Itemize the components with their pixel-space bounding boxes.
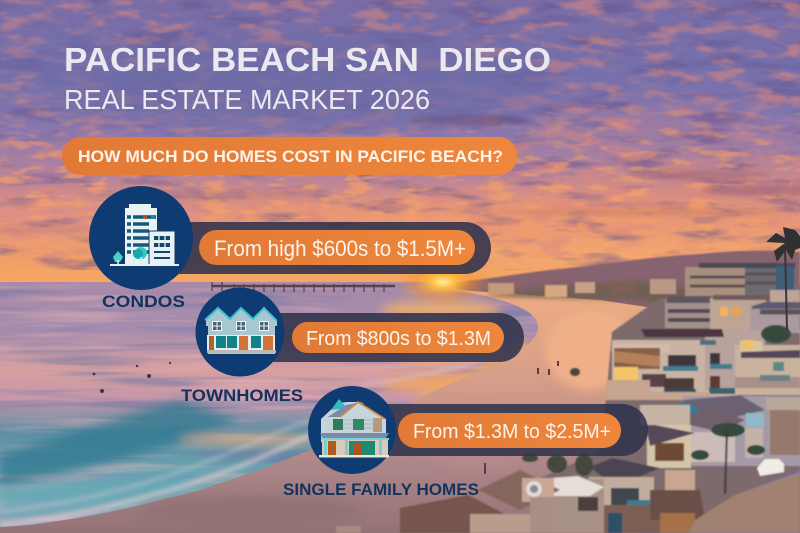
pier [212, 282, 395, 292]
title: PACIFIC BEACH SAN DIEGO [64, 41, 551, 78]
building mass [540, 286, 800, 533]
title block [64, 41, 551, 115]
dark price bar [240, 313, 524, 362]
dark price bar [141, 222, 491, 274]
circle [308, 386, 396, 474]
icon: single family house [319, 399, 389, 458]
panel: single family homes [283, 386, 648, 499]
lower houses [336, 405, 705, 533]
label: TOWNHOMES [181, 386, 303, 405]
ocean [0, 282, 560, 533]
palm trees [691, 325, 791, 460]
label: SINGLE FAMILY HOMES [283, 480, 479, 499]
price pill [398, 413, 621, 448]
right side houses [648, 340, 800, 466]
beach [0, 288, 800, 533]
sun glow [395, 258, 491, 306]
distant hills [400, 251, 800, 330]
subtitle: REAL ESTATE MARKET 2026 [64, 84, 430, 115]
price pill: From high $600s to $1.5M+ [214, 236, 466, 261]
sky [0, 0, 800, 285]
label: CONDOS [102, 292, 185, 311]
price pill [292, 322, 504, 353]
circle [89, 186, 193, 290]
question banner: HOW MUCH DO HOMES COST IN PACIFIC BEACH? [78, 148, 503, 166]
surfers [93, 362, 171, 393]
icon: condo buildings [110, 204, 179, 266]
beachfront buildings [336, 263, 800, 533]
rear apartments [665, 263, 800, 333]
large beige house [606, 329, 765, 400]
circle [196, 288, 284, 376]
price pill: From $1.3M to $2.5M+ [413, 421, 611, 443]
parked car [757, 459, 784, 476]
distant town [480, 279, 700, 312]
question banner [62, 137, 517, 175]
price pill [199, 230, 475, 265]
icon: townhomes [205, 308, 277, 354]
foreground sand [688, 472, 800, 533]
panel: condos [89, 186, 491, 311]
beach people [484, 361, 559, 474]
palm tree [766, 227, 800, 330]
shrubs [522, 368, 593, 476]
price pill: From $800s to $1.3M [306, 328, 491, 350]
panel: townhomes [181, 288, 524, 405]
dark price bar [352, 404, 648, 456]
